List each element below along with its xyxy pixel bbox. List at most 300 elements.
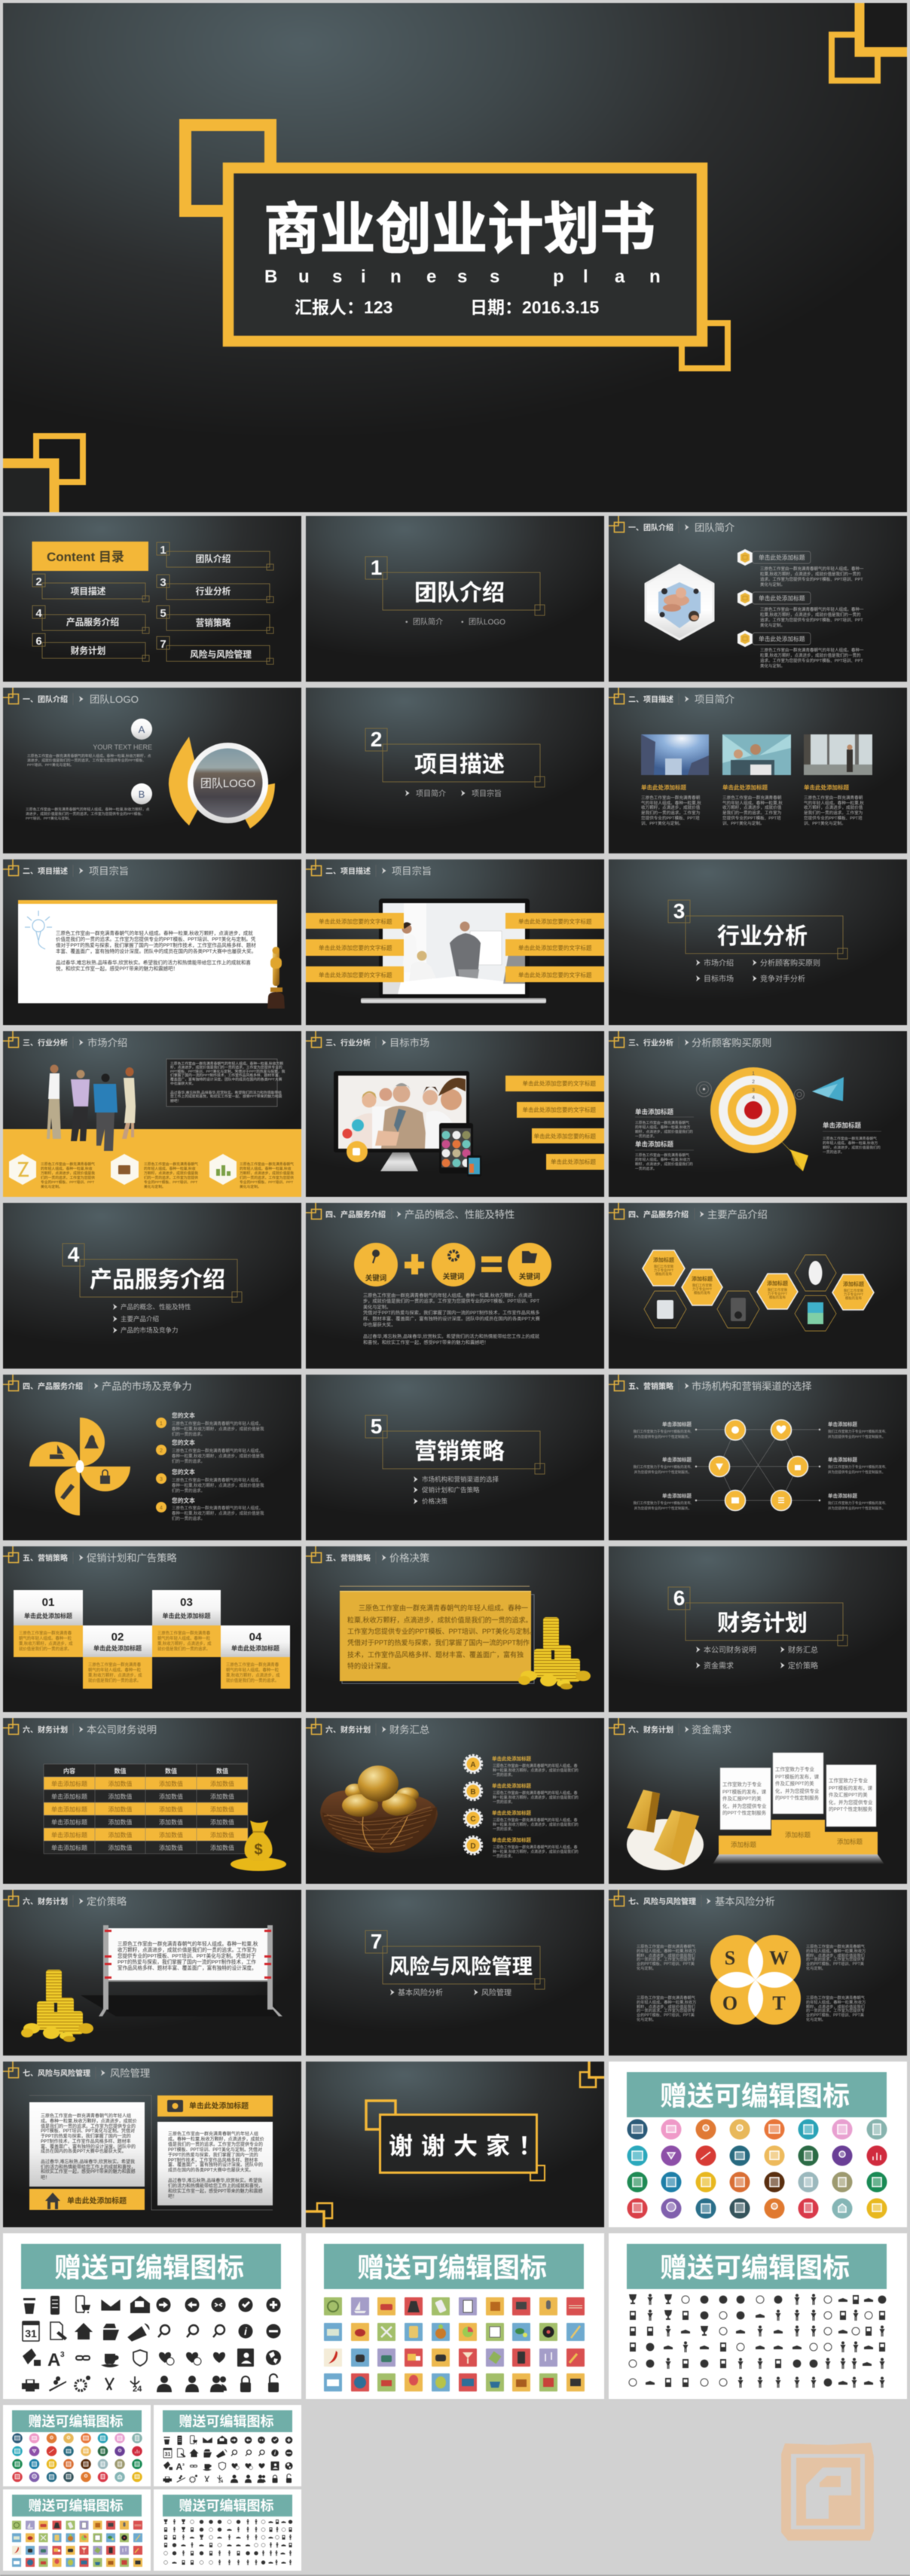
item 4: 三原色工作室由一群充满青春朝气的年轻人组成， xyxy=(172,1505,263,1511)
right text: 颗籽，点滴进步，成就价值是我们的 xyxy=(823,1145,881,1150)
caption 3: 单击此处添加标题 xyxy=(804,783,849,791)
item D: 三原色工作室由一群充满青春朝气的年轻人组成。春 xyxy=(493,1845,578,1850)
card text: 借对于PPT的热爱与探索，我们掌握了国内一流的PPT制作技术，工作室作品风格多样、题材 xyxy=(56,942,256,948)
item 1 xyxy=(157,542,273,570)
section bullets: 主要产品介绍 xyxy=(121,1315,159,1323)
item D xyxy=(464,1836,579,1859)
item A xyxy=(464,1755,579,1778)
section bullets: 市场机构和营销渠道的选择 xyxy=(422,1476,499,1483)
outline hex: device xyxy=(795,1296,836,1331)
card middle: 件及汇报PPT的美 xyxy=(775,1780,814,1787)
right text 2 xyxy=(828,1456,887,1475)
text T: 的年轻人组成。春种一粒粟,秋收万 xyxy=(806,1999,866,2005)
step 03: 就价值是我们的一贯的追求。 xyxy=(157,1646,210,1652)
header: 四、产品服务介绍 xyxy=(628,1210,689,1219)
figures group xyxy=(47,1065,136,1151)
yellow card: 技术，工作室作品风格多样、题材丰富、覆盖面广，富有独 xyxy=(347,1650,524,1659)
card right: 的PPT个性定制服务 xyxy=(829,1805,873,1812)
banner: 赠送可编辑图标 xyxy=(357,2252,547,2283)
section bullets: 本公司财务说明 xyxy=(704,1645,756,1655)
table: 添加数值 xyxy=(159,1805,183,1813)
caption 2: 三原色工作室由一群充满青春朝 xyxy=(722,795,782,801)
section bullets: 项目宗旨 xyxy=(472,789,502,798)
section number: 5 xyxy=(371,1415,382,1438)
item B: 种一粒粟,秋收万颗籽，点滴进步，成就价值是我们的 xyxy=(493,1795,579,1800)
body text: 和喜悦，和欣实工作室一起，感受PPT带来的魅力和震撼吧！ xyxy=(363,1339,489,1345)
left text 2 xyxy=(633,1456,692,1475)
item 6 xyxy=(32,633,149,661)
keyword circle 3 xyxy=(508,1243,551,1286)
table: 添加数值 xyxy=(210,1818,234,1826)
text box: 们掌握了国内一流的PPT制作技术，工作室作品风格多样、题材丰富、 xyxy=(170,1073,282,1078)
table: 添加数值 xyxy=(108,1831,133,1839)
left text 1: 的年轻人组成。春种一粒粟,秋收万 xyxy=(635,1125,690,1130)
slide: team logo xyxy=(3,688,301,853)
right text 1: 我们工作室致力于专业PPT模板的发布, xyxy=(828,1429,887,1434)
panel: small tiles preview xyxy=(3,2489,151,2571)
card left: 件及汇报PPT的美 xyxy=(722,1795,762,1802)
item 1: 1 xyxy=(160,544,166,557)
feature 3: 们的一贯的追求。工作室为您提供 xyxy=(240,1175,294,1180)
step 04: 04 xyxy=(249,1631,262,1644)
left text 1: 单击添加标题 xyxy=(635,1108,674,1116)
thanks text: 谢谢大家！ xyxy=(389,2132,551,2159)
step 04: 三原色工作室由一群充满青春 xyxy=(226,1662,279,1668)
date: 日期：2016.3.15 xyxy=(470,298,600,317)
channel nodes xyxy=(710,1420,808,1511)
left text 1: 颗籽，点滴进步，成就价值是我们的 xyxy=(635,1129,693,1134)
table: 单击添加标题 xyxy=(51,1831,87,1839)
banner: 赠送可编辑图标 xyxy=(660,2252,850,2283)
monitor with photo xyxy=(334,1071,469,1171)
header: 产品的概念、性能及特性 xyxy=(405,1208,515,1220)
header xyxy=(609,1375,812,1392)
header: 项目宗旨 xyxy=(392,865,432,877)
feature 1: 三原色工作室由一群充满青春朝气 xyxy=(41,1161,95,1167)
text block A: 三原色工作室由一群充满青春朝气的年轻人组成。春种一粒粟,秋收万颗籽，点 xyxy=(27,753,151,758)
slide: section 1 xyxy=(306,516,604,682)
right card: 吧！ xyxy=(168,2194,177,2199)
item 3: 3 xyxy=(160,1477,163,1482)
item 1: 单击此处添加标题 xyxy=(759,554,805,561)
banner stand: 室作品风格多样、题材丰富、覆盖面广，富有独特的设计深度。 xyxy=(118,1964,257,1971)
item 3: 您的文本 xyxy=(172,1468,195,1476)
card middle: 的PPT个性定制服务 xyxy=(775,1794,820,1801)
section bullets: 产品的概念、性能及特性 xyxy=(121,1303,191,1311)
text box: 籽，点滴进步，成就价值是我们的一贯的追求。工作室为您提供专业的 xyxy=(170,1065,282,1070)
header: 市场机构和营销渠道的选择 xyxy=(692,1380,812,1392)
caption 2: 训、PPT美化与定制。 xyxy=(722,820,765,826)
header: 分析顾客购买原则 xyxy=(692,1036,771,1048)
item 1: 三原色工作室由一群充满青春朝气的年轻人组成， xyxy=(172,1421,263,1427)
right card: 值是我们的一贯的追求。工作室为您提供专业的 xyxy=(168,2141,263,2147)
item D: 单击此处添加标题 xyxy=(492,1836,532,1843)
item C: 种一粒粟,秋收万颗籽，点滴进步，成就价值是我们的 xyxy=(493,1822,579,1827)
label 3: 单击此处添加您要的标题 xyxy=(533,1132,596,1140)
table: 内容 xyxy=(63,1767,75,1775)
item 5: 营销策略 xyxy=(196,618,231,628)
square top-left xyxy=(366,2101,395,2129)
header: 六、财务计划 xyxy=(23,1897,68,1906)
table: 添加数值 xyxy=(159,1780,183,1787)
text O: 的一贯的追求。工作室为您提供专 xyxy=(637,2007,695,2013)
label left 1: 单击此处添加您要的文字标题 xyxy=(319,917,392,925)
left card: 于PPT的热爱与探索，我们掌握了国内一流的 xyxy=(41,2133,131,2139)
right card: 品过春华,难忘秋熟,品味春华,欣赏秋实。希望我 xyxy=(168,2178,262,2184)
yellow hex 2: 模板的发布 xyxy=(694,1290,711,1296)
top rule xyxy=(340,1586,530,1587)
item 4: 春种一粒粟,秋收万颗籽，点滴进步，成就价值是我 xyxy=(172,1510,264,1516)
yellow hex 1: 添加标题 xyxy=(653,1256,674,1263)
bottom left bar: 单击此处添加标题 xyxy=(67,2196,127,2205)
panel: free icons, silhouettes xyxy=(609,2233,907,2399)
table: 添加数值 xyxy=(159,1793,183,1800)
feature 1: 的年轻人组成。春种一粒粟,秋收 xyxy=(41,1166,93,1171)
slide: project purpose laptop xyxy=(306,859,604,1025)
step 04: 朝气的年轻人组成。春种一粒 xyxy=(226,1667,279,1673)
tagline: YOUR TEXT HERE xyxy=(93,743,152,751)
section bullets xyxy=(414,1476,499,1505)
header: 六、财务计划 xyxy=(325,1725,371,1735)
yellow card: 凭借对于PPT的热爱与探索，我们掌握了国内一流的PPT制作 xyxy=(347,1638,530,1647)
slide: section 3 xyxy=(609,859,907,1025)
body text: 品过春华,难忘秋熟,品味春华,欣赏秋实。希望我们的活力和热情能带给您工作上的成就 xyxy=(363,1333,539,1339)
text O: 三原色工作室由一群充满青春朝气 xyxy=(637,1995,695,2001)
target chart: 2 xyxy=(752,1079,755,1085)
yellow hex 4: 模板的发布 xyxy=(845,1296,863,1301)
card text: 悦，和欣实工作室一起，感受PPT带来的魅力和震撼吧！ xyxy=(56,965,178,972)
header: 价格决策 xyxy=(389,1552,429,1564)
step 04 xyxy=(221,1625,290,1689)
caption 2 xyxy=(722,783,783,826)
table: 添加数值 xyxy=(108,1818,133,1826)
header: 二、项目描述 xyxy=(628,694,673,704)
label right 1: 单击此处添加您要的文字标题 xyxy=(518,917,592,925)
banner xyxy=(12,2410,142,2432)
item C: C xyxy=(470,1815,476,1824)
item 2: 春种一粒粟,秋收万颗籽，点滴进步，成就价值是我 xyxy=(172,1453,264,1459)
item C: 一贯的追求。 xyxy=(493,1827,515,1832)
reporter: 汇报人：123 xyxy=(295,298,392,317)
text box xyxy=(166,1059,286,1106)
yellow hex 4 xyxy=(832,1274,874,1310)
caption 2: 单击此处添加标题 xyxy=(722,783,768,791)
item D: 一贯的追求。 xyxy=(493,1854,515,1859)
card left: PPT模板的发布，课 xyxy=(722,1788,767,1795)
yellow floor xyxy=(3,1129,301,1197)
feature 2: 万颗籽，点滴进步，成就价值是我 xyxy=(144,1170,198,1176)
item 1: 1 xyxy=(160,1421,163,1427)
icon grid xyxy=(163,2436,292,2484)
item 2: 单击此处添加标题 xyxy=(759,594,805,602)
text box: 中也屡获大奖。 xyxy=(170,1081,196,1086)
feature 2: 三原色工作室由一群充满青春朝气 xyxy=(144,1161,198,1167)
left card: 成员在国内的各类PPT大赛中也屡获大奖。 xyxy=(41,2148,127,2154)
card right: 件及汇报PPT的美 xyxy=(829,1791,868,1798)
left card: 们的活力和热情能带给您工作上的成就和喜悦， xyxy=(41,2164,136,2170)
photo 3 xyxy=(804,734,872,775)
ball B: B xyxy=(139,789,145,800)
panel: small silhouettes preview xyxy=(154,2489,301,2571)
yellow hex 2: 我们工作室致 xyxy=(692,1283,713,1288)
golden eggs in nest xyxy=(320,1766,438,1853)
caption 1: 三原色工作室由一群充满青春朝 xyxy=(641,795,701,801)
text S: 业的PPT模板、PPT培训、PPT美 xyxy=(637,1961,695,1967)
corner top right xyxy=(580,2062,604,2087)
section frame xyxy=(365,1415,545,1474)
slide: product concept xyxy=(306,1203,604,1369)
section bullets xyxy=(696,958,820,984)
item A: 种一粒粟,秋收万颗籽，点滴进步，成就价值是我们的 xyxy=(493,1768,579,1773)
feature 1: 们的一贯的追求。工作室为您提供 xyxy=(41,1175,95,1180)
label right 1 xyxy=(505,913,604,929)
header xyxy=(306,1203,515,1220)
banner stand xyxy=(99,1925,282,2016)
panel: free icons, colour tiles xyxy=(306,2233,604,2399)
table: 数值 xyxy=(216,1767,228,1775)
left card: 三原色工作室由一群充满青春朝气的年轻人组 xyxy=(41,2113,131,2119)
caption 2: 您提供专业的PPT模板、PPT培 xyxy=(722,815,781,821)
label right 2: 单击此处添加您要的文字标题 xyxy=(518,944,592,951)
yellow hex 1: 我们工作室致 xyxy=(654,1264,674,1269)
caption 1: 是我们的一贯的追求。工作室为 xyxy=(641,810,701,816)
podium: 添加标题 xyxy=(837,1838,863,1845)
header xyxy=(3,1718,157,1735)
text box: PPT模板、PPT培训、PPT美化与定制。凭借对于PPT的热爱与探索，我 xyxy=(170,1069,286,1074)
text T: 化与定制。 xyxy=(806,2016,826,2022)
section bullets: 团队简介 xyxy=(413,617,443,627)
card right: PPT模板的发布，课 xyxy=(829,1784,873,1791)
left text 3 xyxy=(633,1492,692,1511)
item 4: 产品服务介绍 xyxy=(66,617,119,627)
caption 1 xyxy=(641,783,701,826)
step 01: 粟,秋收万颗籽，点滴进步，成 xyxy=(19,1641,73,1647)
network lines xyxy=(695,1429,820,1501)
item 1 xyxy=(737,549,864,588)
feature 2: 们的一贯的追求。工作室为您提供 xyxy=(144,1175,198,1180)
body text: 美化与定制。 xyxy=(363,1305,391,1311)
left card: 品过春华,难忘秋熟,品味春华,欣赏秋实。希望我 xyxy=(41,2159,135,2165)
icon grid xyxy=(627,2120,887,2219)
yellow hex 4: 我们工作室致 xyxy=(844,1288,864,1293)
right card: 成员在国内的各类PPT大赛中也屡获大奖。 xyxy=(168,2167,254,2173)
photo 2 xyxy=(722,734,791,775)
text W: 化与定制。 xyxy=(806,1965,826,1971)
section number: 1 xyxy=(371,556,382,579)
caption 3 xyxy=(804,783,864,826)
icon grid xyxy=(324,2297,585,2391)
bottom left bar xyxy=(29,2189,145,2210)
label 4: 单击此处添加标题 xyxy=(551,1158,596,1165)
header: 项目简介 xyxy=(695,693,734,705)
header xyxy=(609,1718,731,1735)
text T: 颗籽，点滴进步，成就价值是我们 xyxy=(806,2004,865,2010)
step 02: 就价值是我们的一贯的追求。 xyxy=(88,1677,141,1683)
feature 2 xyxy=(111,1154,198,1189)
keyword circle 2: 关键词 xyxy=(443,1272,464,1281)
slide: pricing decision xyxy=(306,1546,604,1712)
slide: team intro xyxy=(609,516,907,682)
cover frame: top-left square xyxy=(185,125,270,211)
section title: 产品服务介绍 xyxy=(90,1268,225,1293)
right card: PPT模板、PPT培训、PPT美化与定制。凭借对 xyxy=(168,2147,262,2153)
feature 2: 专业的PPT模板、PPT培训、PPT xyxy=(144,1180,197,1185)
item 1: 美化与定制。 xyxy=(760,581,785,588)
section bullets xyxy=(113,1303,191,1334)
header: 团队简介 xyxy=(695,521,734,533)
item 3 xyxy=(157,575,273,603)
table: 添加数值 xyxy=(210,1780,234,1787)
section frame xyxy=(668,1587,847,1646)
body text: 中也屡获大奖。 xyxy=(363,1322,395,1328)
right card: PPT制作技术，工作室作品风格多样、题材丰 xyxy=(168,2157,258,2163)
paper plane xyxy=(812,1077,844,1101)
section bullets: 财务汇总 xyxy=(788,1645,818,1655)
table: 添加数值 xyxy=(159,1844,183,1851)
header: 三、行业分析 xyxy=(325,1038,371,1048)
item 1: 粒粟,秋收万颗籽，点滴进步，成就价值是我们的一贯的 xyxy=(760,571,861,577)
right text 2: 我们工作室致力于专业PPT模板的发布, xyxy=(828,1464,887,1470)
table: 添加数值 xyxy=(108,1844,133,1851)
slide: contents xyxy=(3,516,301,682)
yellow hex 3: 添加标题 xyxy=(767,1280,788,1286)
yellow hex 4: 力于专业PPT xyxy=(844,1292,863,1297)
label 3 xyxy=(532,1128,604,1143)
feature 1: 专业的PPT模板、PPT培训、PPT xyxy=(41,1180,94,1185)
header: 二、项目描述 xyxy=(23,866,68,876)
node icons xyxy=(716,1425,801,1503)
outline hex: mouse xyxy=(795,1255,836,1291)
panel: small black preview xyxy=(154,2405,301,2486)
item 7: 风险与风险管理 xyxy=(190,649,252,660)
right text: 三原色工作室由一群充满青春朝气 xyxy=(823,1136,877,1141)
left text 2: 三原色工作室由一群充满青春朝气 xyxy=(635,1152,689,1158)
card right: 工作室致力于专业 xyxy=(829,1777,868,1784)
table: 单击添加标题 xyxy=(51,1793,87,1800)
slide: project summary xyxy=(609,688,907,853)
square bottom-right xyxy=(530,2165,545,2181)
gold bars xyxy=(627,1790,704,1870)
slide: marketing channels xyxy=(609,1375,907,1540)
yellow hex 2: 添加标题 xyxy=(692,1275,713,1282)
section title: 项目描述 xyxy=(414,752,505,777)
SWOT chart: W xyxy=(769,1947,789,1969)
item 4: 们的一贯的追求。 xyxy=(172,1515,205,1521)
right card: 富、覆盖面广，富有独特的设计深度。团队中的 xyxy=(168,2162,263,2168)
text S: 的一贯的追求。工作室为您提供专 xyxy=(637,1956,695,1962)
text block B: 滴进步，成就价值是我们的一贯的追求。工作室为您提供专业的PPT模板、 xyxy=(26,811,145,816)
caption 2: 是我们的一贯的追求。工作室为 xyxy=(722,810,782,816)
item 3: 们的一贯的追求。 xyxy=(172,1488,205,1494)
left text 2: 的年轻人组成。春种一粒粟,秋收万 xyxy=(635,1157,690,1162)
banner: 赠送可编辑图标 xyxy=(179,2413,274,2429)
slide: buying principles xyxy=(609,1031,907,1197)
body text: 凭借对于PPT的热爱与探索，我们掌握了国内一流的PPT制作技术，工作室作品风格多 xyxy=(363,1310,539,1316)
section bullets: 项目简介 xyxy=(416,789,446,798)
caption 1: 训、PPT美化与定制。 xyxy=(641,820,683,826)
header: 三、行业分析 xyxy=(628,1038,673,1048)
item 3 xyxy=(156,1468,264,1494)
item 6: 6 xyxy=(35,635,42,648)
section number: 7 xyxy=(371,1930,382,1953)
left text 1 xyxy=(635,1108,694,1139)
equals sign xyxy=(481,1256,502,1272)
section number: 6 xyxy=(673,1586,685,1610)
item 4: 4 xyxy=(35,607,42,620)
header xyxy=(3,1890,127,1907)
section bullets: 竞争对手分析 xyxy=(760,974,805,984)
banner: 赠送可编辑图标 xyxy=(660,2080,850,2111)
item 2 xyxy=(156,1439,264,1464)
cover title: 商业创业计划书 xyxy=(264,198,655,261)
text W: 三原色工作室由一群充满青春朝气 xyxy=(806,1943,865,1949)
feature 3: 三原色工作室由一群充满青春朝气 xyxy=(240,1161,294,1167)
card right: 化，并为您提供专业 xyxy=(829,1799,873,1805)
header: 二、项目描述 xyxy=(325,866,371,876)
text box: 您工作上的成就和喜悦，和欣实工作室一起，感受PPT带来的魅力和震 xyxy=(170,1094,282,1099)
cover main title frame xyxy=(228,168,702,341)
step 03: 粟,秋收万颗籽，点滴进步，成 xyxy=(157,1641,212,1647)
left text 2: 我们工作室致力于专业PPT模板的发布, xyxy=(633,1464,692,1470)
table: 单击添加标题 xyxy=(51,1818,87,1826)
contents heading xyxy=(32,542,148,571)
label right 3 xyxy=(505,966,604,982)
header: 市场介绍 xyxy=(87,1036,127,1048)
banner stand: 您提供专业的PPT模板、PPT培训、PPT美化与定制。凭借对于 xyxy=(118,1952,256,1959)
feature 1: 美化与定制。 xyxy=(41,1184,63,1189)
text box: 三原色工作室由一群充满青春朝气的年轻人组成。春种一粒粟,秋收万颗 xyxy=(170,1061,283,1067)
slide: pricing strategy xyxy=(3,1890,301,2056)
table: 单击添加标题 xyxy=(51,1805,87,1813)
panel: small circles preview xyxy=(3,2405,151,2486)
caption 1: 气的年轻人组成。春种一粒粟,秋 xyxy=(641,800,701,806)
item 2: 2 xyxy=(160,1448,163,1454)
left text 1: 单击添加标题 xyxy=(662,1421,692,1427)
item 3: 美化与定制。 xyxy=(760,663,785,669)
step 02: 朝气的年轻人组成。春种一粒 xyxy=(88,1667,142,1673)
target chart: 1 xyxy=(752,1071,755,1076)
table: 添加数值 xyxy=(210,1793,234,1800)
header: 一、团队介绍 xyxy=(628,523,673,533)
item 3: 单击此处添加标题 xyxy=(759,635,805,642)
SWOT chart: T xyxy=(772,1992,786,2014)
panel: free icons, circles xyxy=(609,2062,907,2227)
table xyxy=(44,1764,248,1854)
step 02: 粟,秋收万颗籽，点滴进步，成 xyxy=(88,1672,142,1678)
SWOT chart xyxy=(710,1935,801,2025)
icon grid xyxy=(164,2519,292,2565)
feature 2: 美化与定制。 xyxy=(144,1184,166,1189)
feature 3: 万颗籽，点滴进步，成就价值是我 xyxy=(240,1170,294,1176)
slide: section 2 xyxy=(306,688,604,853)
left text 2 xyxy=(635,1140,694,1171)
item 2: 项目描述 xyxy=(71,586,106,597)
header xyxy=(306,1546,429,1564)
section bullets: 产品的市场及竞争力 xyxy=(121,1326,179,1334)
right text 1 xyxy=(828,1421,887,1439)
header: 四、产品服务介绍 xyxy=(325,1210,386,1219)
left card: 值是我们的一贯的追求。工作室为您提供专业的 xyxy=(41,2123,136,2129)
panel: free icons, black xyxy=(3,2233,301,2399)
label left 2: 单击此处添加您要的文字标题 xyxy=(319,944,392,951)
feature 3: 专业的PPT模板、PPT培训、PPT xyxy=(240,1180,293,1185)
keyword circle 2 xyxy=(432,1243,475,1286)
text S: 的年轻人组成。春种一粒粟,秋收万 xyxy=(637,1948,696,1954)
keyword circle 1: 关键词 xyxy=(365,1274,386,1283)
ring marker right xyxy=(794,1089,805,1100)
feature 3: 的年轻人组成。春种一粒粟,秋收 xyxy=(240,1166,292,1171)
step 04: 就价值是我们的一贯的追求。 xyxy=(226,1677,279,1683)
